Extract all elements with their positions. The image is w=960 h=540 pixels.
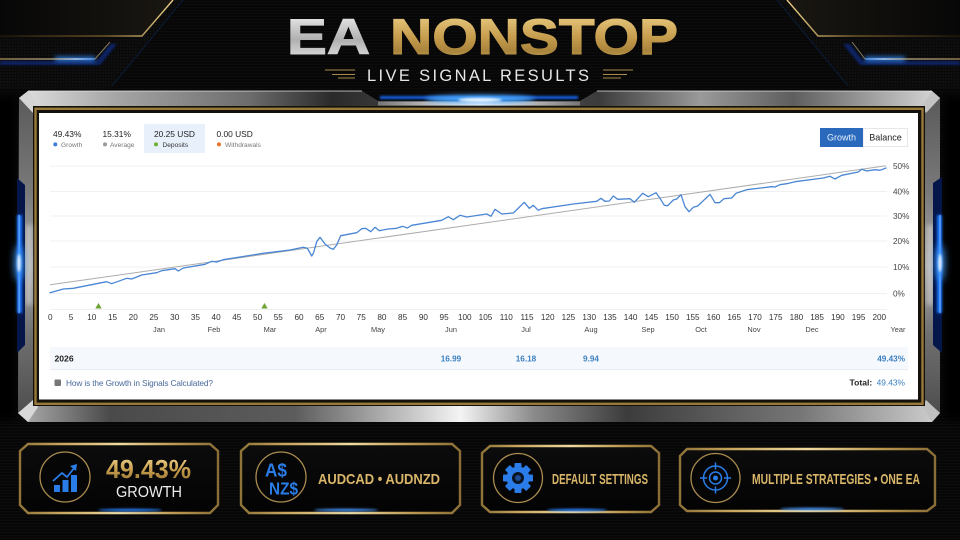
x axis labels: 95 bbox=[440, 313, 449, 322]
monthly results row: 16.18 bbox=[516, 354, 537, 364]
x axis labels: 105 bbox=[479, 313, 493, 322]
corner plate: top right bbox=[777, 0, 960, 88]
icon: rising chart bbox=[40, 452, 90, 502]
stat: withdrawals: 0.00 USD bbox=[216, 129, 253, 139]
month labels: Aug bbox=[584, 325, 598, 334]
panel: white chart area bbox=[39, 113, 918, 400]
y axis labels: 10% bbox=[893, 263, 909, 272]
card: currency pairs bbox=[241, 444, 460, 513]
monthly results row: 2026 bbox=[54, 354, 74, 364]
total bbox=[850, 378, 906, 388]
y axis labels: 30% bbox=[893, 212, 909, 221]
trend line bbox=[50, 166, 886, 285]
left side blue light bar bbox=[15, 178, 32, 353]
title: EA NONSTOP: EA bbox=[287, 9, 370, 65]
card: growth bbox=[20, 444, 218, 513]
stat: growth: 49.43% bbox=[53, 129, 82, 139]
x axis labels: 30 bbox=[170, 313, 180, 322]
y axis labels bbox=[893, 162, 909, 298]
x axis labels: 170 bbox=[748, 313, 762, 322]
x axis labels: 135 bbox=[603, 313, 617, 322]
right side blue light bar bbox=[927, 177, 944, 353]
stat: deposits highlighted: 20.25 USD bbox=[154, 129, 195, 139]
x axis labels: 160 bbox=[707, 313, 721, 322]
month labels: Mar bbox=[264, 325, 277, 334]
x axis labels: 15 bbox=[108, 313, 117, 322]
stat: growth bbox=[53, 129, 83, 149]
stat: withdrawals bbox=[216, 129, 262, 149]
x axis labels: 50 bbox=[253, 313, 263, 322]
x axis labels: 40 bbox=[212, 313, 221, 322]
y axis labels: 20% bbox=[893, 237, 909, 246]
x axis labels: 100 bbox=[458, 313, 472, 322]
metallic chart frame bbox=[18, 91, 940, 422]
month labels: Jun bbox=[445, 325, 457, 334]
toggle: growth / balance: Balance bbox=[869, 132, 902, 142]
x axis labels: 140 bbox=[624, 313, 638, 322]
title: EA NONSTOP: NONSTOP bbox=[390, 9, 678, 65]
y axis labels: 50% bbox=[893, 162, 909, 171]
stat: deposits highlighted bbox=[144, 124, 205, 153]
x axis labels: 125 bbox=[562, 313, 576, 322]
icon: currency symbols: A$ bbox=[265, 460, 287, 480]
total: 49.43% bbox=[877, 378, 906, 388]
x axis labels: 165 bbox=[727, 313, 741, 322]
card: default settings: DEFAULT SETTINGS bbox=[552, 471, 648, 488]
top centre blue glow bbox=[380, 95, 578, 103]
month labels bbox=[153, 325, 906, 334]
x axis labels: 10 bbox=[87, 313, 97, 322]
toggle: growth / balance: Growth bbox=[827, 132, 856, 142]
card: default settings bbox=[482, 446, 659, 512]
x axis labels: 70 bbox=[336, 313, 345, 322]
deposit markers bbox=[95, 303, 268, 308]
x axis labels: 190 bbox=[831, 313, 845, 322]
stat: deposits highlighted: Deposits bbox=[162, 142, 189, 149]
growth line bbox=[50, 168, 886, 293]
x axis labels: 45 bbox=[232, 313, 242, 322]
monthly results row: 9.94 bbox=[583, 354, 599, 364]
month labels: Apr bbox=[315, 325, 327, 334]
stat: average: 15.31% bbox=[102, 129, 131, 139]
x axis labels: 85 bbox=[398, 313, 408, 322]
corner plate: top left bbox=[0, 0, 183, 88]
x axis labels: 150 bbox=[665, 313, 679, 322]
monthly results row: 49.43% bbox=[877, 354, 906, 364]
monthly results row bbox=[50, 347, 908, 370]
month labels: Sep bbox=[641, 325, 655, 334]
x axis labels: 20 bbox=[129, 313, 138, 322]
x axis labels: 195 bbox=[852, 313, 866, 322]
month labels: Year bbox=[891, 325, 906, 334]
x axis labels: 175 bbox=[769, 313, 783, 322]
x axis labels: 110 bbox=[500, 313, 513, 322]
x axis labels: 75 bbox=[357, 313, 366, 322]
card: currency pairs: AUDCAD • AUDNZD bbox=[318, 471, 440, 488]
title: EA NONSTOP bbox=[287, 9, 678, 65]
x axis labels: 65 bbox=[315, 313, 325, 322]
month labels: Feb bbox=[208, 325, 220, 334]
monthly results row: 16.99 bbox=[441, 354, 462, 364]
stat: average: Average bbox=[110, 142, 135, 149]
y axis labels: 40% bbox=[893, 188, 909, 196]
month labels: Oct bbox=[695, 325, 707, 334]
x axis labels: 130 bbox=[582, 313, 596, 322]
month labels: Jan bbox=[153, 325, 165, 334]
x axis labels: 200 bbox=[872, 313, 887, 322]
card: multiple strategies bbox=[680, 449, 935, 511]
subtitle: live signal results: LIVE SIGNAL RESULTS bbox=[367, 67, 589, 85]
stat: growth: Growth bbox=[61, 142, 83, 149]
card: growth: GROWTH bbox=[116, 484, 182, 501]
x axis labels: 180 bbox=[790, 313, 804, 322]
x axis labels: 5 bbox=[69, 313, 74, 322]
x axis labels: 0 bbox=[48, 313, 53, 322]
x axis labels: 90 bbox=[419, 313, 428, 322]
x axis labels: 60 bbox=[294, 313, 304, 322]
icon: currency symbols: NZ$ bbox=[269, 478, 298, 498]
x axis labels: 55 bbox=[274, 313, 283, 322]
line chart bbox=[48, 162, 909, 334]
icon: currency symbols bbox=[256, 452, 306, 502]
x axis labels: 25 bbox=[149, 313, 159, 322]
x axis labels: 115 bbox=[520, 313, 534, 322]
stat: average bbox=[102, 129, 135, 149]
x axis labels: 120 bbox=[541, 313, 555, 322]
month labels: Jul bbox=[521, 325, 531, 334]
card: growth: 49.43% bbox=[106, 456, 191, 484]
icon: target bbox=[691, 454, 740, 502]
x axis labels: 35 bbox=[191, 313, 200, 322]
stat: withdrawals: Withdrawals bbox=[225, 142, 262, 149]
x axis labels bbox=[48, 313, 887, 322]
x axis labels: 155 bbox=[686, 313, 700, 322]
x axis labels: 185 bbox=[810, 313, 824, 322]
toggle: growth / balance bbox=[820, 128, 908, 147]
x axis labels: 80 bbox=[377, 313, 387, 322]
month labels: Dec bbox=[805, 325, 819, 334]
x axis labels: 145 bbox=[644, 313, 659, 322]
help link: How is the Growth in Signals Calculated? bbox=[66, 378, 213, 388]
total: Total: bbox=[850, 378, 872, 388]
month labels: May bbox=[371, 325, 385, 334]
icon: gear bbox=[494, 454, 542, 502]
month labels: Nov bbox=[747, 325, 761, 334]
y axis labels: 0% bbox=[893, 290, 905, 298]
